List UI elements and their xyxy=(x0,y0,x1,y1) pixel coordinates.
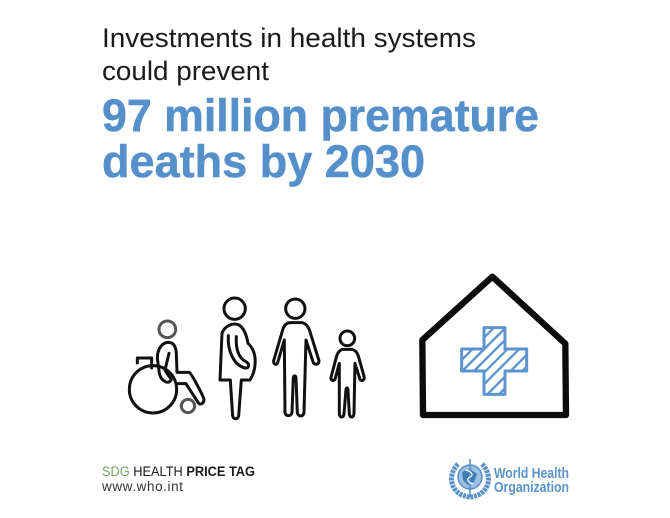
footer: campaign label xyxy=(101,464,255,494)
icon: child xyxy=(331,331,364,417)
medical cross xyxy=(460,325,532,397)
footer: campaign label: www.who.int xyxy=(101,479,183,494)
icon: health facility xyxy=(422,277,566,415)
logo: World Health Organization xyxy=(451,459,569,497)
logo wordmark: Organization xyxy=(494,480,569,496)
icon group: people xyxy=(129,298,364,419)
headline statistic: 97 million premature xyxy=(102,90,539,141)
intro heading: could prevent xyxy=(102,56,270,86)
intro heading: Investments in health systems xyxy=(102,23,476,53)
icon: pregnant woman xyxy=(220,298,255,419)
headline statistic: deaths by 2030 xyxy=(102,136,425,187)
intro heading xyxy=(102,23,476,86)
icon: person in wheelchair xyxy=(129,321,204,413)
footer: campaign label: SDG HEALTH PRICE TAG xyxy=(102,464,255,479)
logo wordmark: World Health xyxy=(494,466,569,482)
infographic xyxy=(102,28,570,500)
icon: man xyxy=(274,299,319,416)
logo emblem xyxy=(451,459,489,497)
logo wordmark xyxy=(494,466,569,496)
house outline xyxy=(422,277,566,415)
headline statistic xyxy=(102,90,539,187)
